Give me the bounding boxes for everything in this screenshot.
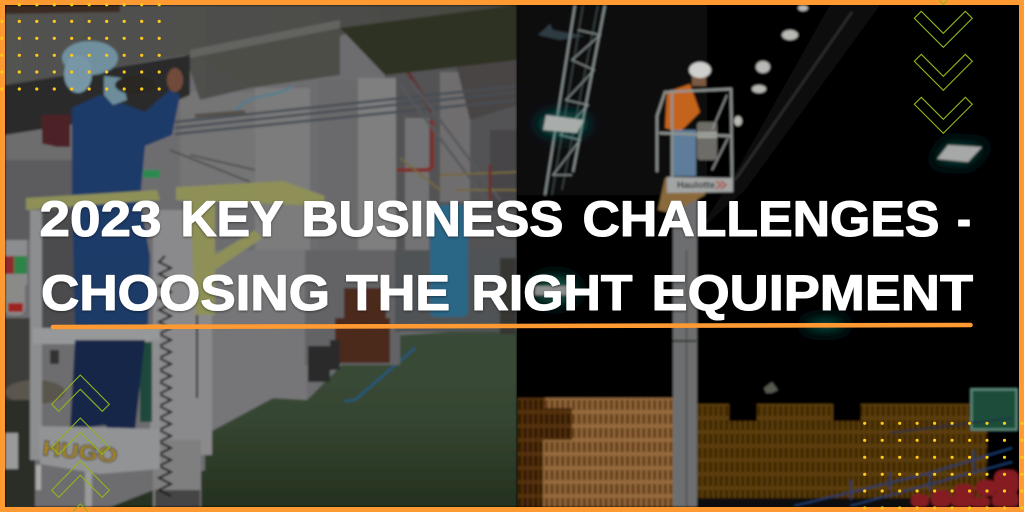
photo: operator on Haulotte lift in theatre (517, 5, 1019, 507)
stage lights truss right (700, 5, 880, 230)
teal glow centre (805, 320, 845, 330)
lower white wall (214, 252, 306, 427)
bucket rails (657, 89, 732, 178)
mast (673, 192, 697, 507)
title: KEY (180, 191, 284, 247)
title: RIGHT (472, 265, 632, 321)
pipes and cable trays (170, 72, 517, 205)
green exit box (972, 390, 1016, 430)
brick wall left (517, 398, 675, 507)
glowing ceiling panel right (935, 143, 985, 164)
theatre ceiling streak (538, 24, 585, 40)
title: - (957, 191, 971, 247)
teal glow behind title (533, 276, 577, 304)
HUGO control panel: HUGO (41, 437, 118, 468)
red seats (911, 470, 1019, 507)
blue railings (794, 418, 1012, 506)
Haulotte bucket label (667, 177, 733, 193)
back wall structure (254, 59, 517, 251)
icon: down chevrons top-right (914, 0, 972, 133)
red pallets (335, 288, 390, 363)
title: EQUIPMENT (652, 265, 973, 321)
left equipment (5, 240, 65, 508)
Haulotte bucket label: Haulotte (677, 180, 715, 191)
lift cage frame (30, 210, 160, 507)
lift yellow rails (26, 181, 325, 315)
brick wall right (697, 400, 1019, 507)
small object on wall (764, 382, 778, 393)
ceiling duct (5, 5, 517, 240)
floor blue line (345, 348, 415, 401)
title: 2023 (40, 191, 162, 247)
decorative dots top-left (0, 3, 161, 91)
lift mast (153, 210, 212, 507)
icon: up chevrons bottom-left (52, 375, 109, 512)
title: CHALLENGES (582, 191, 940, 247)
flight cases (308, 340, 340, 382)
photo: technician on lift in factory (5, 5, 517, 508)
title: THE (346, 265, 450, 321)
teal glowing panel left (537, 111, 589, 137)
HUGO control panel (38, 426, 160, 474)
background person (500, 258, 516, 334)
worker (62, 41, 183, 430)
lighting truss left (545, 5, 605, 195)
floor (110, 328, 517, 507)
title: CHOOSING (41, 265, 330, 321)
decorative dots bottom-right (863, 422, 1024, 510)
title underline (53, 325, 970, 327)
bucket operator (658, 62, 717, 213)
blue tank (430, 205, 468, 317)
title: BUSINESS (302, 191, 564, 247)
title (40, 191, 973, 321)
